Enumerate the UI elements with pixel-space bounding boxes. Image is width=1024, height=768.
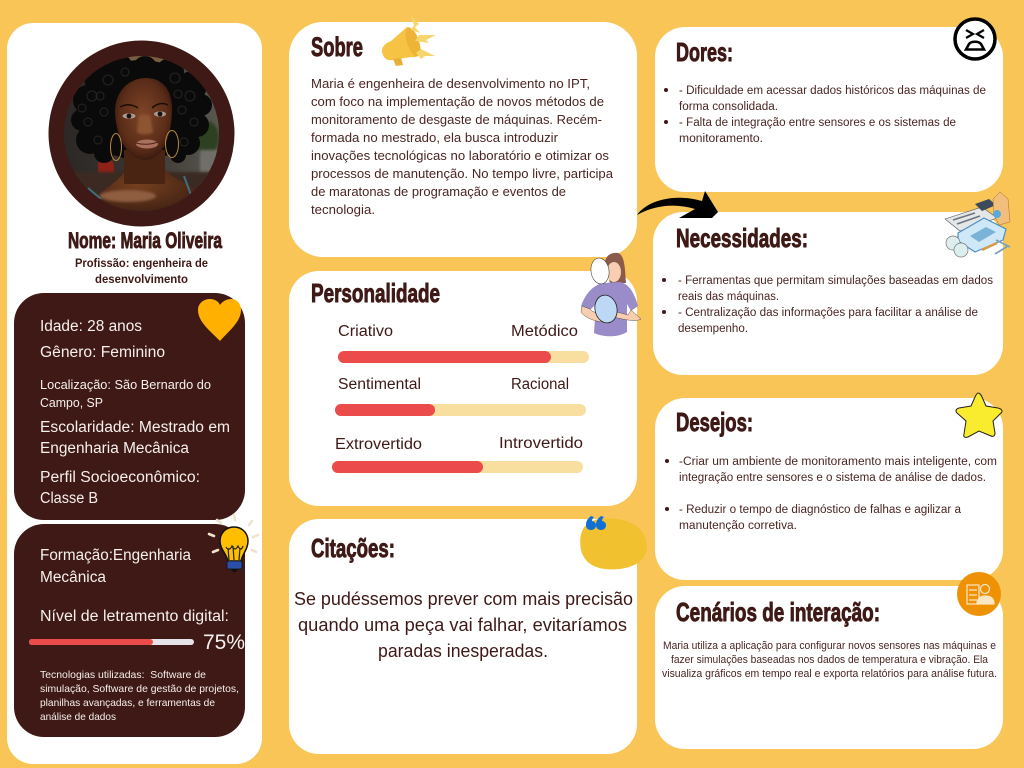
needs list: - Centralização das informações para facilitar a análise de (678, 307, 978, 319)
trait: criativo / metódico: Criativo (338, 323, 393, 340)
arrow (637, 191, 718, 218)
pains list: forma consolidada. (679, 101, 778, 113)
panel: desires (655, 398, 1003, 580)
panel: interaction scenarios (655, 586, 1003, 749)
profession: desenvolvimento (95, 272, 188, 286)
demographics text: Perfil Socioeconômico: (40, 469, 200, 486)
quote text (294, 589, 633, 661)
desires list: - Reduzir o tempo de diagnóstico de falhas e agilizar a (679, 504, 962, 516)
profession: Profissão: engenheira de (75, 256, 208, 270)
demographics text: Classe B (40, 490, 98, 507)
heading: Desejos: Desejos: (676, 407, 753, 437)
pains list: - Dificuldade em acessar dados históricos das máquinas de (679, 85, 986, 97)
heading: Sobre: Sobre (311, 32, 363, 62)
icon: yellow blob with quote marks (580, 516, 647, 569)
trait: extrovertido / introvertido (332, 435, 583, 473)
about text: processos de manutenção. No tempo livre, participa (311, 166, 614, 181)
quote text: quando uma peça vai falhar, evitaríamos (298, 615, 627, 635)
heading: Dores: Dores: (676, 37, 733, 67)
technologies text: simulação, Software de gestão de projetos, (40, 683, 239, 695)
name: Nome: Maria Oliveira (68, 228, 223, 253)
digital literacy label: Nível de letramento digital: (40, 608, 229, 625)
heading: Necessidades: Necessidades: (676, 223, 808, 253)
about text: formada no mestrado, ela busca introduzir (311, 130, 559, 145)
heading: Cenários de interação: Cenários de interação: (676, 597, 880, 627)
desires list: integração entre sensores e o sistema de análise de dados. (679, 472, 986, 484)
trait: sentimental / racional: Sentimental (338, 376, 421, 393)
technologies text: análise de dados (40, 711, 116, 723)
icon: person with masks (581, 253, 641, 336)
icon: tools and supplies (945, 192, 1010, 257)
about text: com foco na implementação de novos métodos de (311, 94, 604, 109)
panel: demographics (14, 293, 245, 520)
heading: Personalidade: Personalidade (311, 278, 440, 308)
panel: pains (655, 27, 1003, 192)
education text: Mecânica (40, 569, 106, 586)
pains list: - Falta de integração entre sensores e os sistemas de (679, 117, 956, 129)
digital literacy value: 75% (203, 631, 245, 654)
icon: star (956, 393, 1002, 437)
icon: light bulb (209, 515, 258, 572)
digital literacy bar (29, 639, 194, 645)
trait: extrovertido / introvertido: Introvertido (499, 435, 583, 452)
panel: education and digital literacy (14, 524, 245, 737)
scenarios text: visualiza gráficos em tempo real e exporta relatórios para análise futura. (662, 668, 997, 680)
panel: profile (7, 23, 262, 764)
demographics text: Escolaridade: Mestrado em (40, 419, 230, 436)
demographics text: Gênero: Feminino (40, 344, 165, 361)
quote text: Se pudéssemos prever com mais precisão (294, 589, 633, 609)
icon: megaphone (382, 16, 436, 66)
about text: monitoramento de desgaste de máquinas. Recém- (311, 112, 602, 127)
panel: needs (653, 212, 1003, 375)
trait: criativo / metódico: Metódico (511, 323, 578, 340)
demographics text: Idade: 28 anos (40, 318, 142, 335)
scenarios text: fazer simulações baseadas nos dados de temperatura e vibração. Ela (671, 654, 988, 666)
heading: Citações: Citações: (311, 533, 395, 563)
icon: heart (198, 299, 241, 341)
quote text: paradas inesperadas. (378, 641, 548, 661)
portrait photo in ring (48, 40, 234, 226)
pains list: monitoramento. (679, 133, 763, 145)
needs list: reais das máquinas. (678, 291, 779, 303)
needs list: desempenho. (678, 323, 748, 335)
demographics text: Campo, SP (40, 395, 103, 410)
profession (75, 256, 208, 286)
about text: Maria é engenheira de desenvolvimento no IPT, (311, 76, 590, 91)
scenarios text (662, 640, 997, 680)
scenarios text: Maria utiliza a aplicação para configurar novos sensores nas máquinas e (663, 640, 996, 652)
education text: Formação:Engenharia (40, 547, 191, 564)
trait: sentimental / racional (335, 376, 586, 416)
panel: quotes (289, 519, 637, 754)
trait: extrovertido / introvertido: Extrovertido (335, 436, 422, 453)
technologies text: Tecnologias utilizadas: Software de (40, 669, 206, 681)
panel: about (289, 16, 637, 257)
panel: personality (289, 271, 637, 506)
about text (311, 76, 614, 217)
education text (40, 547, 191, 586)
needs list: - Ferramentas que permitam simulações baseadas em dados (678, 275, 993, 287)
demographics text (40, 318, 230, 507)
icon: engineer with checklist (957, 572, 1001, 616)
needs list (662, 275, 993, 335)
trait: criativo / metódico (338, 323, 589, 363)
desires list (665, 456, 997, 532)
icon: angry face (955, 19, 995, 59)
technologies text: planilhas avançadas, e ferramentas de (40, 697, 215, 709)
pains list (664, 85, 986, 145)
demographics text: Localização: São Bernardo do (40, 377, 211, 392)
about text: inovações tecnológicas no laboratório e otimizar os (311, 148, 609, 163)
about text: tecnologia. (311, 202, 375, 217)
about text: de maratonas de programação e eventos de (311, 184, 566, 199)
desires list: -Criar um ambiente de monitoramento mais inteligente, com (679, 456, 997, 468)
technologies text (40, 669, 239, 723)
trait: sentimental / racional: Racional (511, 376, 569, 393)
demographics text: Engenharia Mecânica (40, 440, 189, 457)
desires list: manutenção corretiva. (679, 520, 797, 532)
